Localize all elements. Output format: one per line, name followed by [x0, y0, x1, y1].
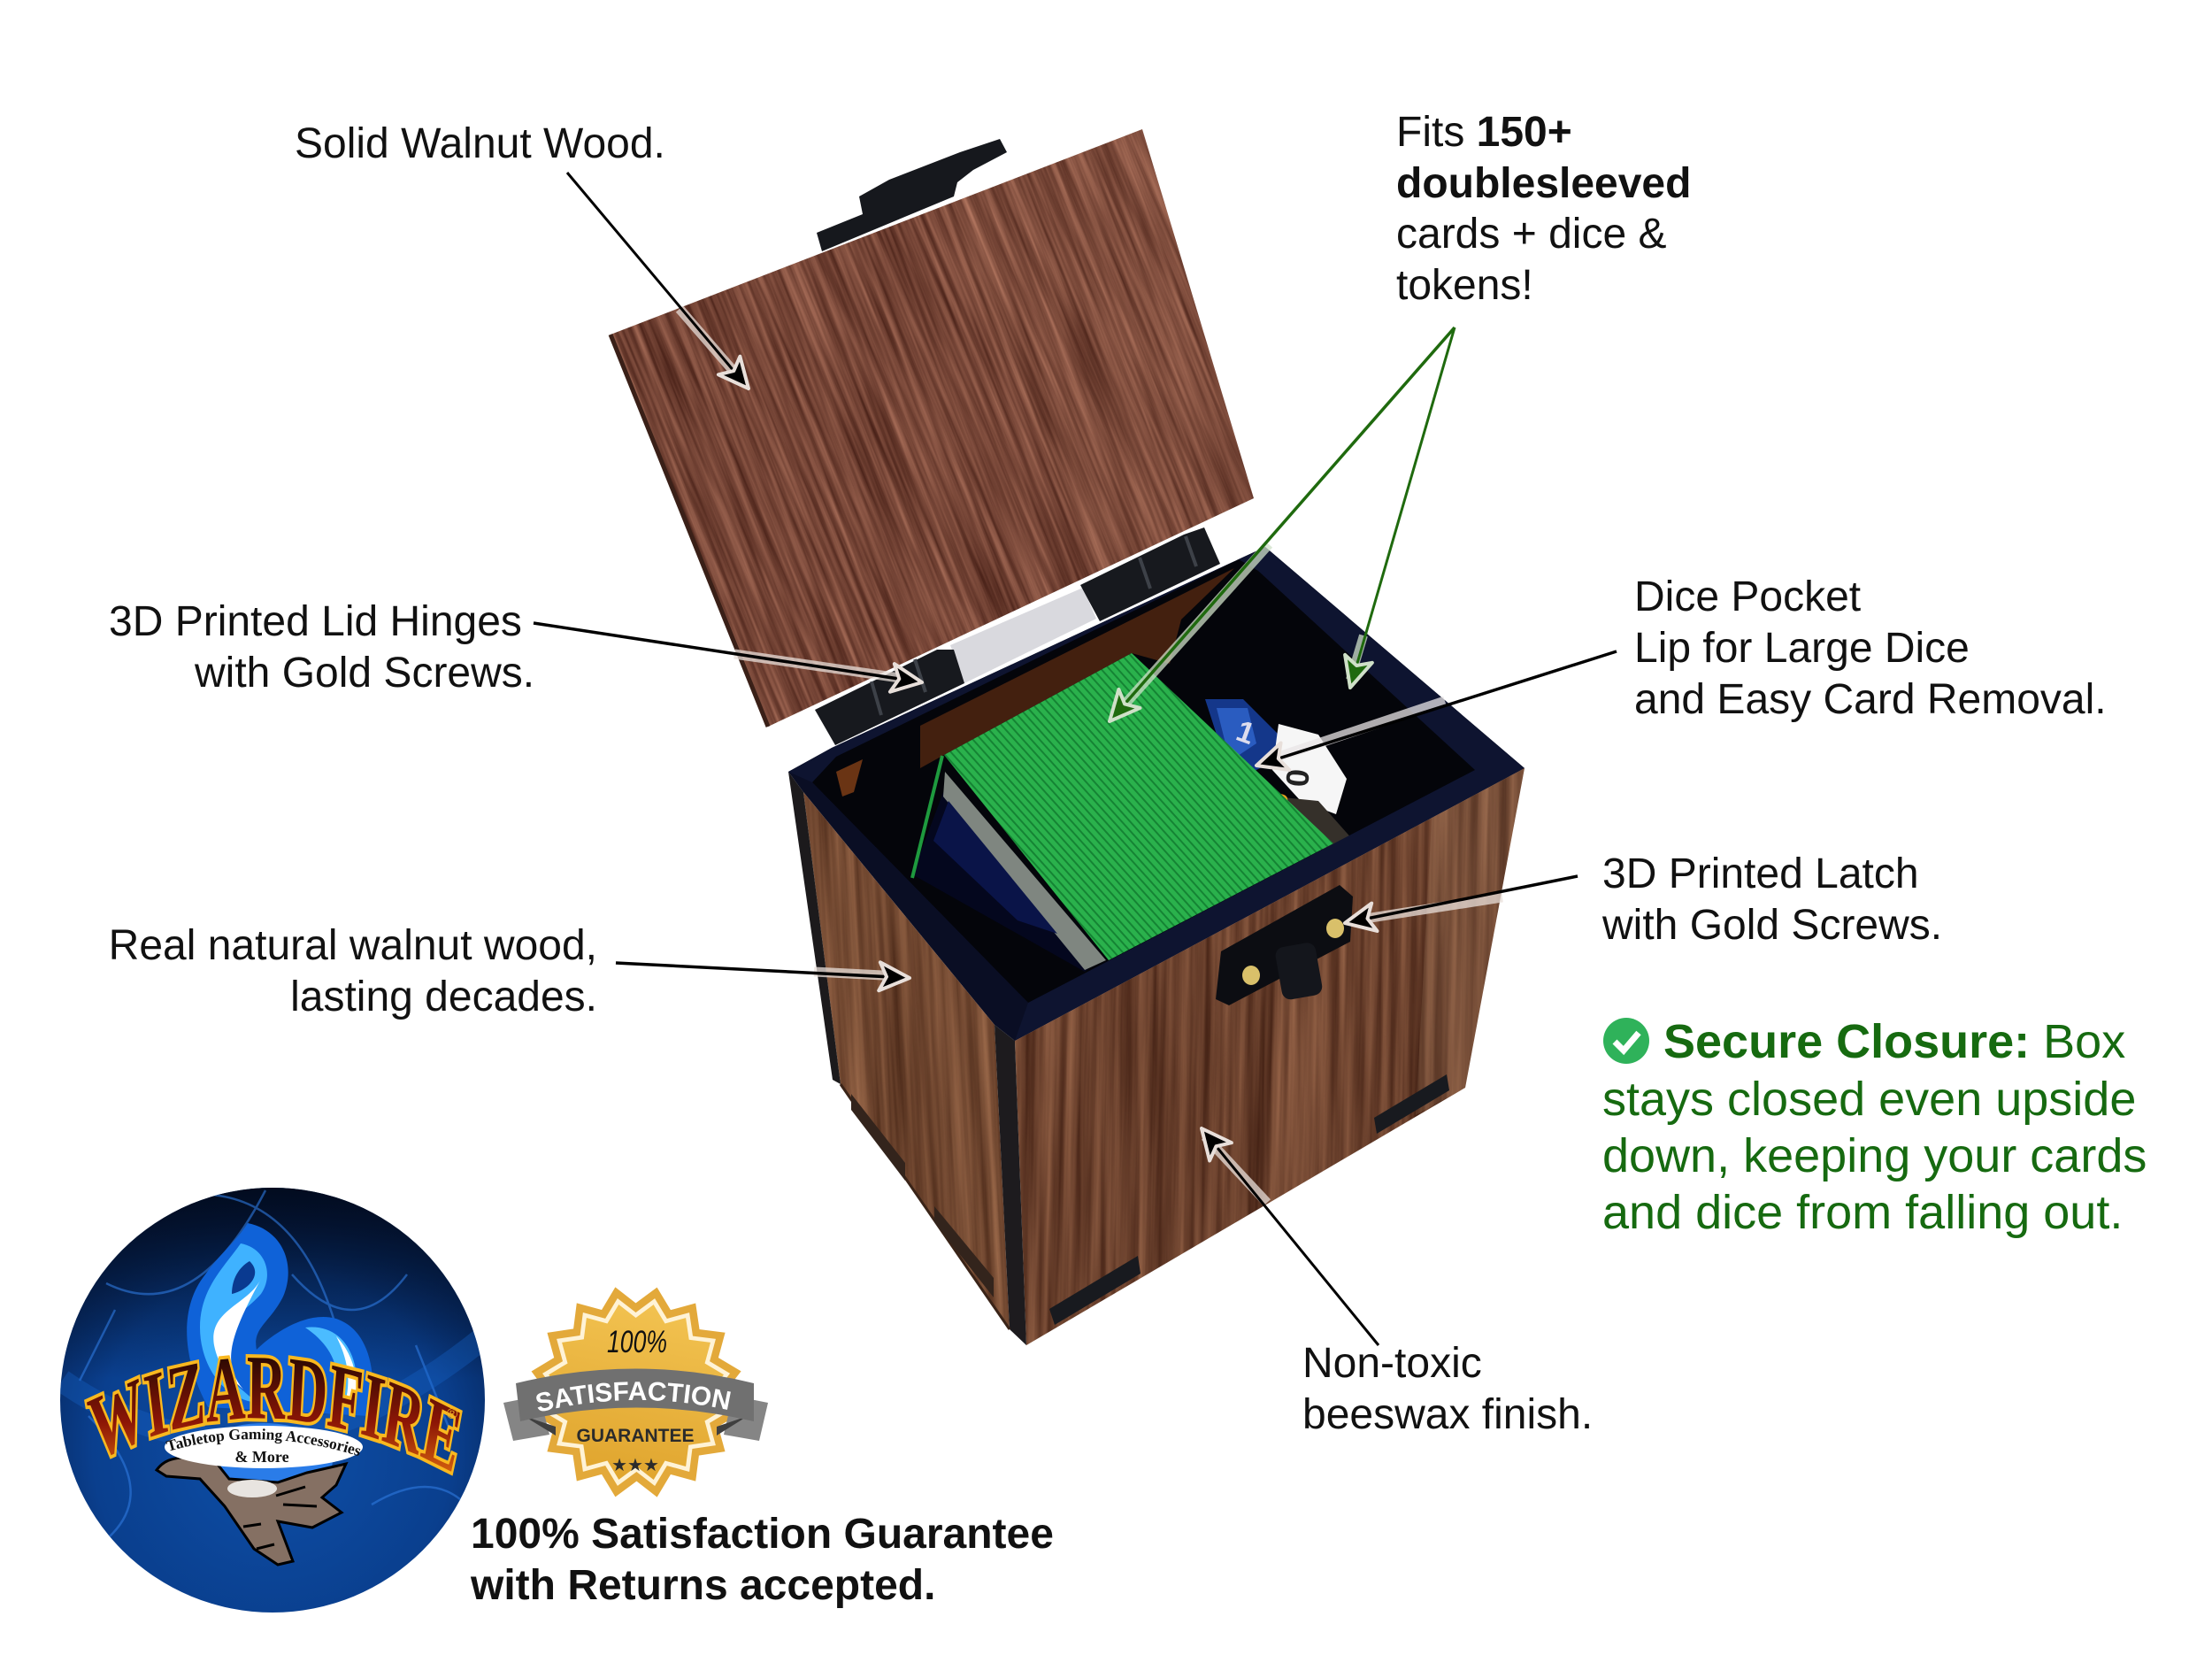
- badge gold burst: [511, 1267, 761, 1517]
- arrow: natural walnut: [616, 963, 910, 978]
- arrow: dice pocket: [1256, 651, 1617, 766]
- badge ribbon tails: [503, 1396, 549, 1441]
- icon: green check: [1603, 1018, 1649, 1064]
- label: natural walnut: Real natural walnut wood,: [109, 922, 597, 969]
- label: dice pocket: and Easy Card Removal.: [1634, 676, 2107, 723]
- label: latch: 3D Printed Latch: [1602, 851, 1919, 897]
- label: lid hinges: with Gold Screws.: [194, 650, 534, 697]
- dice: blue d8: [1205, 699, 1279, 779]
- label: dice pocket: Lip for Large Dice: [1634, 625, 1970, 672]
- box interior: [788, 547, 1525, 1041]
- dice: 1: [1232, 714, 1259, 751]
- dice: 0: [1279, 767, 1317, 789]
- front face: [1015, 768, 1525, 1345]
- label: beeswax: beeswax finish.: [1302, 1391, 1593, 1438]
- dice: white d20: [1272, 724, 1347, 814]
- label: fits 150+ cards: cards + dice &: [1396, 211, 1666, 258]
- dice: grey swirl d10: [1274, 797, 1354, 854]
- badge: satisfaction guarantee: [503, 1287, 768, 1497]
- box rim: [788, 547, 1525, 1041]
- left face: [803, 792, 1010, 1328]
- logo: wizardfire: [60, 1188, 485, 1613]
- bottom edge left: [841, 1084, 1010, 1329]
- callout: secure closure: stays closed even upside: [1602, 1073, 2136, 1126]
- label: fits 150+ cards: doublesleeved: [1396, 160, 1691, 207]
- badge: satisfaction guarantee: ★★★: [611, 1456, 659, 1475]
- callout: secure closure: Secure Closure:: [1663, 1015, 2030, 1068]
- registered mark: ®: [447, 1405, 458, 1422]
- left hinge: [815, 650, 964, 745]
- logo hand: [157, 1458, 346, 1565]
- dice: [1205, 699, 1354, 854]
- arrow: beeswax finish: [1202, 1128, 1379, 1345]
- arrow: cards green: [1110, 327, 1455, 721]
- right hinge: [1080, 527, 1220, 621]
- label: natural walnut: lasting decades.: [290, 974, 597, 1020]
- playing card front: [912, 788, 1101, 972]
- green card stack: [944, 653, 1333, 960]
- badge: satisfaction guarantee: GUARANTEE: [576, 1426, 695, 1446]
- label: fits 150+ cards: Fits 150+: [1396, 109, 1572, 156]
- product photo: walnut box: [228, 0, 1627, 1388]
- foot tabs: [1374, 1074, 1449, 1134]
- left rim cover: [788, 772, 1028, 1041]
- gold screws: [1242, 966, 1260, 985]
- arrow: solid walnut wood: [567, 173, 749, 389]
- logo tagline: & More: [234, 1448, 289, 1466]
- label: dice pocket: Dice Pocket: [1634, 573, 1861, 620]
- label: fits 150+ cards: tokens!: [1396, 262, 1533, 309]
- badge: satisfaction guarantee: 100%: [607, 1325, 667, 1359]
- inner wood corner: [836, 759, 863, 797]
- label: lid hinges: 3D Printed Lid Hinges: [109, 598, 522, 645]
- badge: satisfaction guarantee: SATISFACTION: [536, 1382, 731, 1411]
- logo: wizardfire: WIZARDFIRE: [84, 1354, 463, 1476]
- guarantee text: 100% Satisfaction Guarantee: [471, 1511, 1054, 1558]
- logo light streaks: [79, 1189, 461, 1537]
- arrow: lid hinges: [534, 623, 922, 682]
- left dark edge: [788, 772, 841, 1084]
- open lid: [611, 129, 1254, 727]
- logo tagline: Tabletop Gaming Accessories: [165, 1428, 361, 1456]
- dice: gold numeral: 8: [1270, 788, 1289, 827]
- callout: secure closure: [1602, 1015, 2147, 1239]
- hinge highlights: [872, 536, 1196, 715]
- lid edge: [611, 335, 768, 727]
- guarantee text: with Returns accepted.: [470, 1562, 935, 1609]
- arrow: dice green: [1350, 327, 1455, 688]
- badge text: [538, 1400, 739, 1412]
- white gap between hinges: [950, 588, 1096, 683]
- callout: secure closure: and dice from falling out.: [1602, 1186, 2123, 1239]
- callout: secure closure: down, keeping your cards: [1602, 1129, 2147, 1182]
- badge ribbon: [516, 1368, 754, 1421]
- logo blue flames: [187, 1223, 373, 1416]
- inner back wood wall: [920, 568, 1234, 768]
- latch: [1216, 885, 1353, 1005]
- logo orb: [195, 1423, 333, 1497]
- label: beeswax: Non-toxic: [1302, 1340, 1482, 1387]
- corner dark strip: [995, 1025, 1026, 1345]
- label: latch: with Gold Screws.: [1601, 902, 1942, 949]
- callout: secure closure: Box: [2030, 1015, 2125, 1068]
- label: solid walnut wood: Solid Walnut Wood.: [295, 120, 665, 167]
- logo wordmark: [0, 1419, 619, 1489]
- lid latch part: [817, 139, 1007, 251]
- arrow: latch: [1345, 876, 1578, 923]
